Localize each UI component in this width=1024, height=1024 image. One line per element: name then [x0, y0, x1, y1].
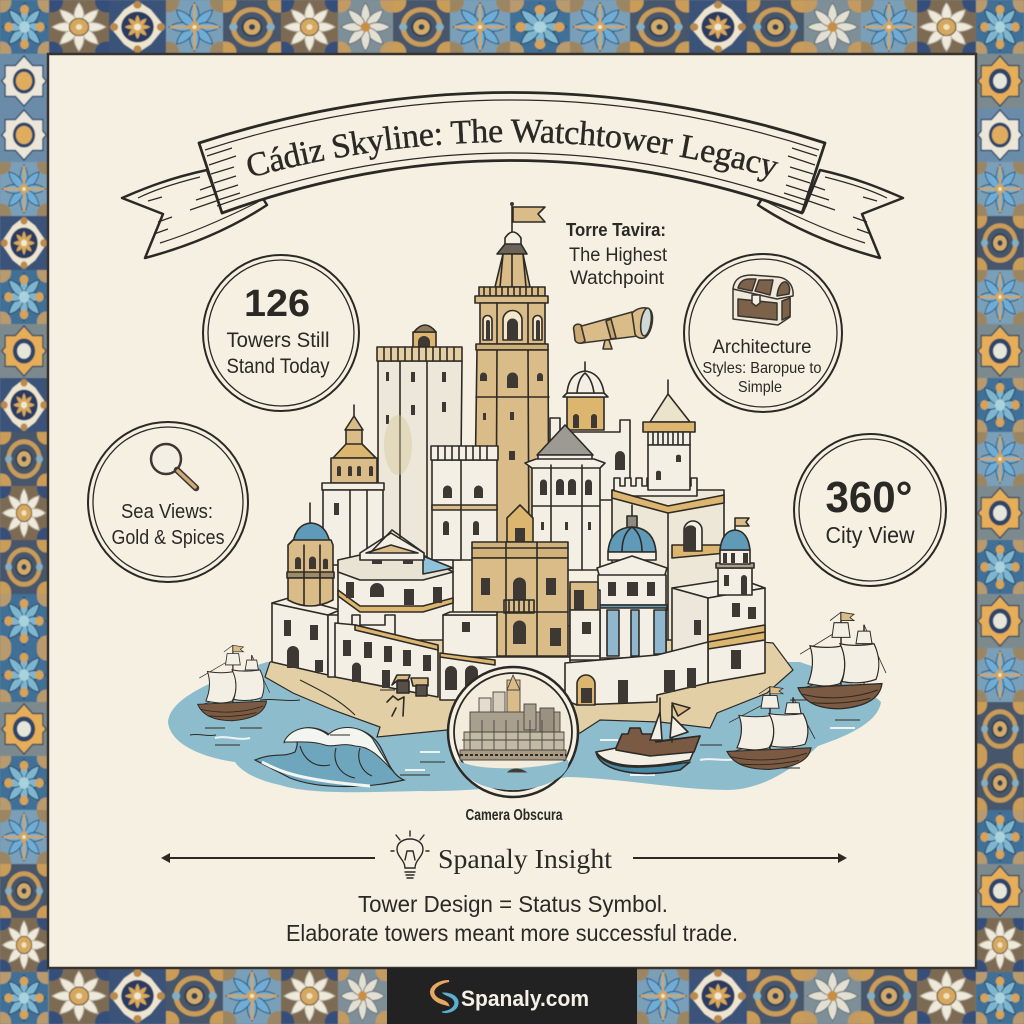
callout: Torre Tavira: Torre Tavira:: [566, 220, 666, 240]
central white blocks: [440, 582, 600, 700]
lower left white blocks: [272, 597, 342, 677]
left ribbon tail: [122, 170, 267, 258]
arrow: right divider: [633, 853, 847, 863]
stat circle: architecture: [684, 254, 842, 412]
blue dome church: [596, 505, 667, 658]
logo text: Spanaly.com: [461, 986, 589, 1011]
ship: front galleon: [727, 687, 815, 769]
round drum building: [338, 530, 453, 640]
long front building: [335, 623, 438, 697]
callout: Torre Tavira: Watchpoint: [570, 268, 665, 289]
grey dome building: [525, 425, 605, 570]
tile border: right column: [968, 54, 1024, 1024]
arrow: left divider: [161, 853, 375, 863]
stat circle: 360 degree view: 360°: [826, 473, 912, 522]
insight text: Tower Design = Status Symbol.: [358, 891, 668, 917]
white water highlights: [215, 706, 855, 775]
footer logo bar: [387, 968, 637, 1024]
title ribbon banner: [120, 91, 904, 260]
ship: right galleon: [798, 612, 886, 709]
tile border: bottom row: [39, 959, 985, 1024]
Torre Tavira tower: [474, 202, 549, 560]
camera obscura label: Camera Obscura: [466, 807, 563, 824]
callout: Torre Tavira: [566, 220, 668, 289]
icon: treasure chest: [733, 275, 793, 325]
sandy shoreline: [265, 620, 793, 737]
stat circle: 126 towers: [203, 255, 359, 411]
wave: [255, 727, 404, 786]
back right castle: [550, 362, 726, 640]
insight heading: Spanaly Insight: [438, 844, 613, 874]
camera obscura circle: [448, 667, 578, 797]
stat circle: sea views: [88, 422, 248, 582]
stat circle: 126 towers: 126: [244, 283, 310, 325]
ship: left galleon: [198, 645, 270, 721]
tan palace building: [472, 505, 568, 656]
title text: Cádiz Skyline: The Watchtower Legacy: [247, 118, 779, 182]
insight text: [286, 891, 738, 946]
icon: magnifying glass: [151, 444, 196, 488]
skyline illustration: [272, 202, 765, 716]
tile border: top row: [0, 0, 1024, 63]
ribbon main band: [199, 92, 825, 213]
stat circle: sea views: Gold & Spices: [112, 527, 224, 549]
left tiered tower: [322, 405, 384, 565]
stat circle: architecture: Architecture: [712, 337, 812, 358]
callout: Torre Tavira: The Highest: [569, 245, 668, 266]
figures on the beach: [387, 696, 404, 716]
icon: telescope: [574, 307, 653, 349]
stat circle: sea views: Sea Views:: [121, 501, 213, 523]
sea: [168, 662, 881, 792]
stat circle: 126 towers: Towers Still: [226, 329, 330, 352]
stat circle: architecture: Simple: [738, 379, 782, 396]
stat circle: architecture: Styles: Baropue to: [702, 360, 822, 377]
water ripples: [190, 680, 860, 775]
ship: small boat with wave: [596, 698, 700, 773]
stat circle: 360 degree view: [794, 434, 946, 586]
lower right wall: [565, 642, 708, 705]
right block with small tower: [672, 518, 765, 683]
right ribbon tail: [758, 170, 903, 258]
crenellated mid tower: [431, 446, 498, 560]
miniature skyline: [458, 675, 568, 790]
left blue dome tower: [287, 503, 334, 606]
tile border: left column: [0, 54, 56, 1024]
insight text: Elaborate towers meant more successful trade.: [286, 920, 738, 946]
stat circle: 360 degree view: City View: [826, 522, 915, 548]
icon: Spanaly logo: [431, 981, 458, 1013]
stat circle: 126 towers: Stand Today: [226, 355, 330, 378]
white crenellated tower: [377, 325, 462, 560]
icon: lightbulb: [391, 831, 429, 878]
